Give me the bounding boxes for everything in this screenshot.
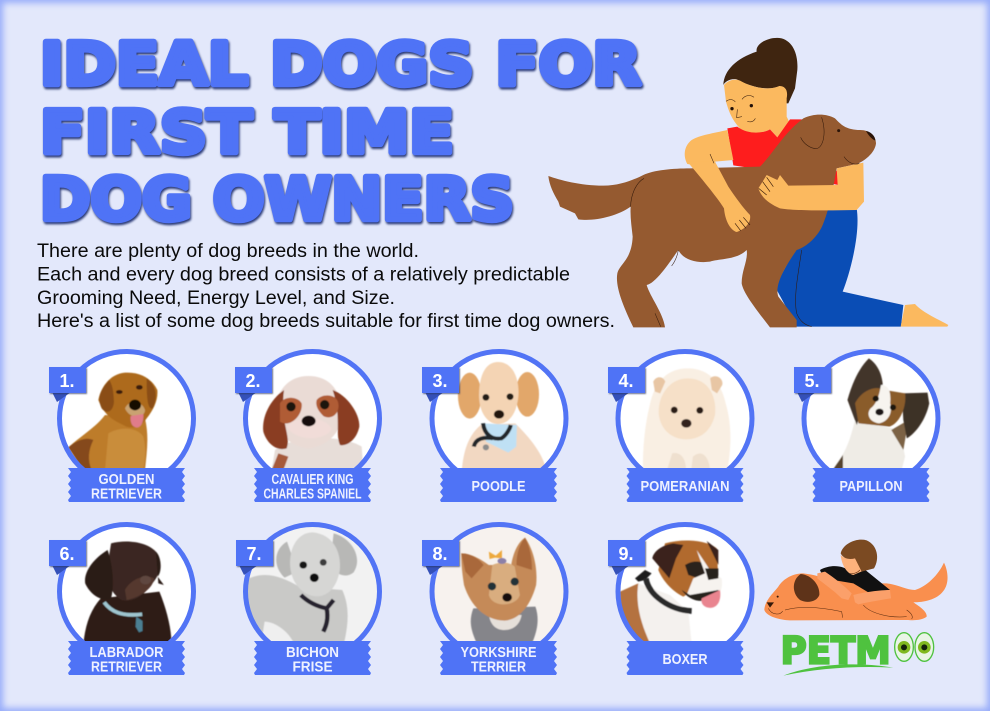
boy arms (817, 572, 891, 604)
ribbon label: GOLDEN (98, 472, 154, 488)
ribbon label (68, 468, 185, 502)
ribbon label: CHARLES SPANIEL (264, 486, 362, 502)
ribbon label: TERRIER (471, 660, 526, 676)
logo letters: PETM (781, 629, 891, 673)
number tag (608, 540, 645, 575)
orange dog (764, 563, 948, 620)
logo: petmoo (781, 629, 934, 676)
ring (60, 524, 194, 658)
photo: poodle (458, 362, 546, 470)
face and neck (724, 80, 792, 137)
number tag: 3. (432, 371, 448, 391)
ribbon label (254, 468, 371, 502)
red shirt (727, 119, 838, 185)
number tag (236, 540, 273, 575)
photo: yorkshire terrier (461, 538, 538, 643)
title: DOG OWNERS (40, 164, 514, 234)
number tag: 1. (59, 371, 75, 391)
number tag: 4. (618, 371, 634, 391)
boy face (841, 555, 863, 575)
forearm over dog (687, 162, 750, 232)
front arm (758, 163, 864, 210)
ring (804, 352, 938, 486)
intro text: There are plenty of dog breeds in the world. (37, 241, 419, 262)
number tag (422, 367, 459, 402)
photo: cavalier (263, 376, 363, 470)
card 9: boxer (608, 524, 752, 675)
number tag: 2. (245, 371, 261, 391)
number tag: 6. (59, 544, 75, 564)
dog ear (794, 574, 819, 602)
number tag: 7. (246, 544, 262, 564)
ribbon label: RETRIEVER (91, 660, 162, 676)
ribbon label (254, 641, 371, 676)
number tag (49, 367, 86, 402)
title: IDEAL DOGS FOR (40, 30, 641, 98)
number tag (794, 367, 831, 402)
card 3: poodle (422, 352, 566, 502)
ribbon label: POMERANIAN (640, 479, 730, 495)
card 5: papillon (794, 352, 938, 502)
number tag: 5. (804, 371, 820, 391)
ring (60, 352, 194, 486)
ribbon label: PAPILLON (840, 479, 902, 495)
ring (618, 352, 752, 486)
intro text: Here's a list of some dog breeds suitable for first time dog owners. (37, 311, 615, 332)
number tag (235, 367, 272, 402)
ribbon label: BICHON (286, 645, 339, 661)
title: FIRST TIME (40, 98, 454, 166)
number tag (422, 540, 459, 575)
ribbon label: CAVALIER KING (272, 472, 354, 488)
blue trousers (775, 208, 903, 327)
boy hair (841, 540, 877, 572)
photo: golden retriever (68, 373, 157, 470)
ribbon label: POODLE (472, 479, 526, 495)
details (767, 570, 912, 619)
ribbon label: YORKSHIRE (460, 645, 537, 661)
ribbon label (440, 641, 557, 676)
number tag: 9. (618, 544, 634, 564)
ring (618, 524, 752, 658)
brown dog (548, 115, 876, 327)
title (40, 30, 641, 234)
photo: papillon (833, 358, 929, 470)
ribbon label: FRISE (292, 660, 333, 676)
ribbon label (626, 468, 744, 502)
ring (432, 352, 566, 486)
number tag (608, 367, 645, 402)
ribbon label: RETRIEVER (91, 486, 162, 502)
logo eyes (895, 633, 934, 661)
illustration: boy lying on orange dog (764, 540, 948, 620)
photo: bichon (246, 532, 357, 643)
ribbon label: LABRADOR (90, 645, 164, 661)
photo: pomeranian (643, 368, 730, 470)
foot (901, 304, 948, 327)
ribbon label (440, 468, 557, 502)
boy shirt (820, 566, 890, 592)
card 2: cavalier king charles spaniel (235, 352, 380, 502)
intro text: Grooming Need, Energy Level, and Size. (37, 288, 395, 309)
card 4: pomeranian (608, 352, 752, 502)
number tag (49, 540, 86, 575)
logo swoosh (783, 664, 893, 676)
card 7: bichon frise (236, 524, 380, 676)
card 8: yorkshire terrier (422, 524, 566, 676)
number tag: 8. (432, 544, 448, 564)
ring (432, 524, 566, 658)
illustration: woman hugging brown dog (548, 38, 948, 327)
ribbon label: BOXER (662, 652, 708, 668)
ring (246, 352, 380, 486)
ring (246, 524, 380, 658)
card 6: labrador retriever (49, 524, 194, 676)
intro text: Each and every dog breed consists of a relatively predictable (37, 264, 570, 286)
facial features (726, 96, 755, 122)
ribbon label (626, 641, 744, 675)
photo: boxer (620, 541, 722, 643)
ribbon label (68, 641, 185, 676)
intro text (37, 241, 615, 332)
card 1: golden retriever (49, 352, 194, 502)
dog nose and lines (631, 117, 875, 327)
hair (723, 38, 797, 103)
ribbon label (812, 468, 930, 502)
upper arm behind dog (685, 130, 733, 168)
photo: labrador (83, 542, 171, 643)
